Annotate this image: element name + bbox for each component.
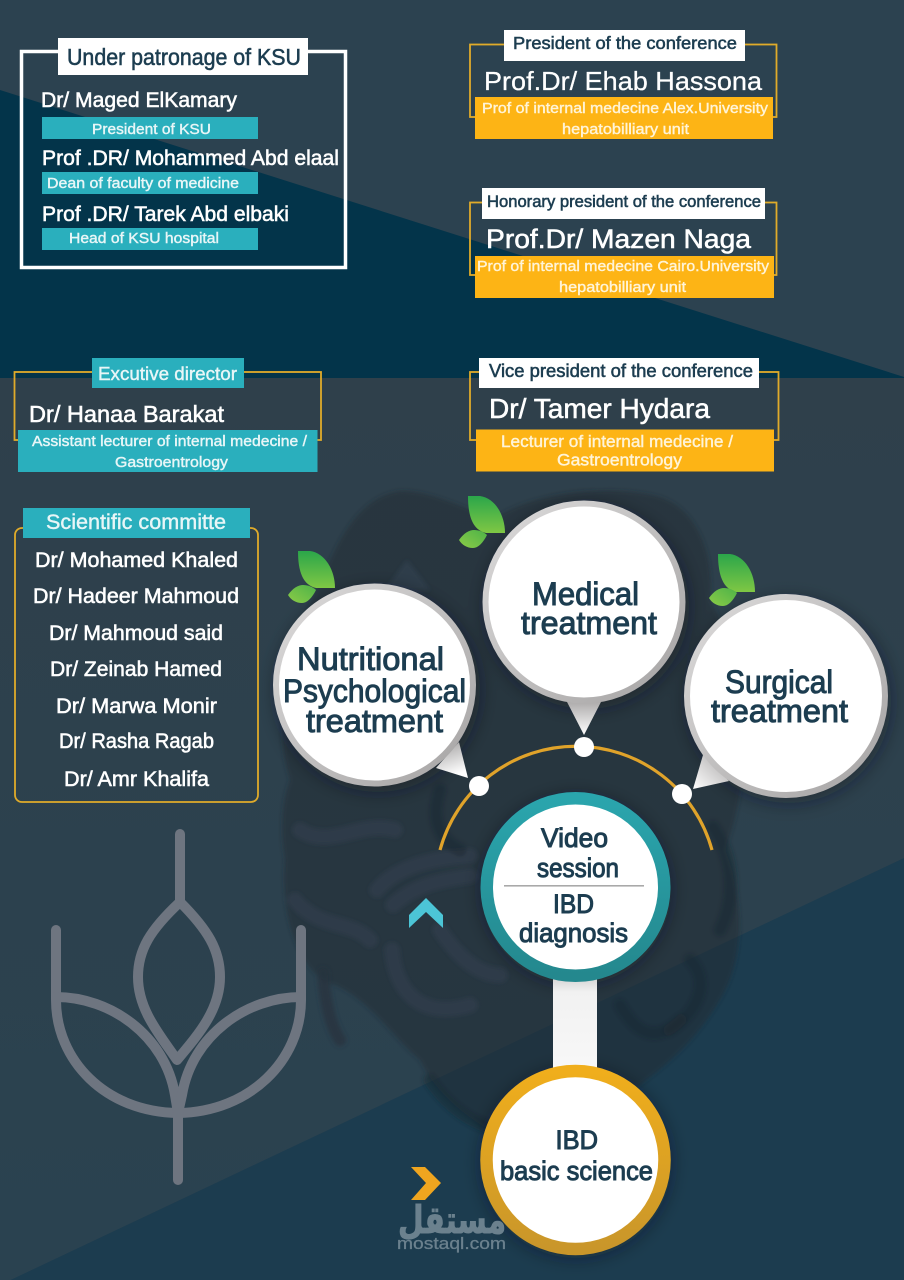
pointer: [566, 700, 602, 735]
node label: [500, 1125, 653, 1186]
name: Tamer Hydara: Dr/ Tamer Hydara: [489, 393, 710, 424]
role: assistant lecturer: Gastroentrology: [115, 455, 229, 471]
node label bottom: diagnosis: [519, 918, 628, 948]
entry: Tarek Abd elbaki: Head of KSU hospital: [69, 231, 219, 247]
node label: basic science: [500, 1156, 653, 1186]
bubble circle: [687, 597, 885, 795]
watermark: mostaql: مستقل: [398, 1198, 506, 1242]
heading: president: [504, 30, 745, 61]
bubble label: [521, 576, 657, 641]
heading: executive: Excutive director: [98, 364, 237, 384]
entry: Mohammed Abd elaal: Prof .DR/ Mohammed Abd elaal: [42, 146, 339, 170]
node label top: Video: [541, 823, 608, 853]
watermark: mostaql: [397, 1198, 506, 1253]
panel: under patronage of KSU: [22, 38, 346, 268]
name: Ehab Hassona: Prof.Dr/ Ehab Hassona: [484, 66, 763, 96]
circle shadows: [276, 505, 891, 1258]
heading: executive: [92, 358, 244, 388]
panel: executive director: [14, 358, 321, 472]
bubble: surgical treatment: [687, 554, 885, 795]
gold bracket frame: [14, 372, 321, 440]
logo: wheat emblem: [56, 834, 301, 1180]
pointer: [436, 742, 468, 778]
entry: Mohammed Abd elaal: [42, 146, 339, 194]
member list: Dr/ Marwa Monir: [56, 695, 217, 718]
node label: IBD: [556, 1125, 598, 1155]
heading: vice president: [479, 358, 759, 388]
bubble label: [283, 641, 466, 739]
panel: honorary president: [470, 188, 776, 298]
node label bottom: IBD: [553, 889, 594, 919]
intestine silhouette backdrop: [282, 491, 744, 1160]
panel: vice president: [470, 358, 778, 472]
member list: [33, 549, 239, 791]
role: lecturer: Lecturer of internal medecine /: [501, 433, 733, 451]
bubble: medical treatment: [459, 496, 682, 735]
pointer: [693, 755, 729, 789]
entry: Maged ElKamary: Dr/ Maged ElKamary: [41, 88, 237, 112]
node label top: [537, 823, 619, 883]
member list: Dr/ Amr Khalifa: [64, 768, 209, 791]
role: lecturer: Gastroentrology: [557, 452, 683, 470]
divider: [504, 885, 644, 887]
member list: Dr/ Mohamed Khaled: [35, 549, 238, 572]
member list: Dr/ Rasha Ragab: [59, 730, 214, 753]
bubble label: treatment: [306, 703, 443, 739]
role: Cairo: Prof of internal medecine Cairo.University: [477, 258, 770, 275]
entry: Tarek Abd elbaki: Prof .DR/ Tarek Abd elbaki: [42, 202, 289, 226]
watermark: mostaql: mostaql.com: [397, 1234, 506, 1253]
bubble label: [711, 664, 848, 729]
node circle: [487, 798, 664, 976]
bubble label: Nutritional: [297, 641, 444, 677]
role: Cairo: hepatobilliary unit: [559, 279, 687, 296]
node circle: [486, 1071, 664, 1249]
icon: leaves: [709, 554, 755, 606]
name: Mazen Naga: Prof.Dr/ Mazen Naga: [486, 224, 752, 254]
role: lecturer: [476, 430, 774, 472]
node label bottom: [519, 889, 628, 948]
entry: Tarek Abd elbaki: [42, 202, 289, 250]
gold bracket frame: [470, 372, 778, 440]
bubble circle: [276, 586, 473, 784]
gold bracket frame: [470, 202, 776, 275]
node: IBD basic science: [486, 1071, 664, 1249]
member list: Dr/ Mahmoud said: [49, 622, 223, 645]
panel: scientific committee: [15, 508, 258, 802]
role: Alexandria: Prof of internal medecine Alex.University: [482, 100, 769, 117]
heading: honorary: [482, 188, 765, 219]
member list: Dr/ Hadeer Mahmoud: [33, 585, 239, 608]
role: Cairo: [475, 256, 774, 298]
panel: president of the conference: [470, 30, 776, 139]
arc node dots: [469, 737, 692, 804]
heading: vice president: Vice president of the conference: [489, 361, 753, 381]
node label top: session: [537, 853, 619, 883]
panel frame: [22, 52, 346, 268]
entry: Maged ElKamary: [41, 88, 258, 139]
bubble label: Surgical: [725, 664, 833, 700]
entry: Maged ElKamary: President of KSU: [92, 122, 211, 138]
bubble: nutritional psychological treatment: [276, 551, 473, 784]
arc connector: [440, 746, 712, 850]
icon: leaves: [459, 496, 505, 548]
role: assistant lecturer: Assistant lecturer of internal medecine /: [32, 434, 308, 450]
entry: Mohammed Abd elaal: Dean of faculty of medicine: [47, 176, 239, 192]
icon: teal chevron up: [409, 898, 443, 928]
heading: president: President of the conference: [513, 33, 737, 53]
member list: Dr/ Zeinab Hamed: [50, 658, 222, 681]
bubble circle: [486, 504, 682, 700]
icon: leaves: [288, 551, 335, 603]
heading: scientific committe: Scientific committe: [46, 511, 226, 534]
gold bracket frame: [470, 44, 776, 117]
gold rounded frame: [15, 528, 258, 802]
heading: honorary: Honorary president of the conference: [487, 193, 761, 211]
name: Hanaa Barakat: Dr/ Hanaa Barakat: [29, 401, 225, 427]
bubble label: Psychological: [283, 673, 466, 709]
heading: under patronage: Under patronage of KSU: [67, 44, 301, 70]
bubble label: treatment: [711, 693, 848, 729]
role: Alexandria: hepatobilliary unit: [562, 121, 690, 138]
role: Alexandria: [475, 97, 773, 139]
role: assistant lecturer: [18, 430, 318, 472]
heading: scientific committe: [23, 508, 250, 538]
heading: under patronage: [58, 38, 308, 75]
bubble label: treatment: [521, 605, 657, 641]
node: video session / IBD diagnosis: [487, 798, 664, 976]
icon: gold chevron right: [411, 1167, 441, 1200]
connector bar: [553, 972, 597, 1072]
bubble label: Medical: [532, 576, 639, 612]
